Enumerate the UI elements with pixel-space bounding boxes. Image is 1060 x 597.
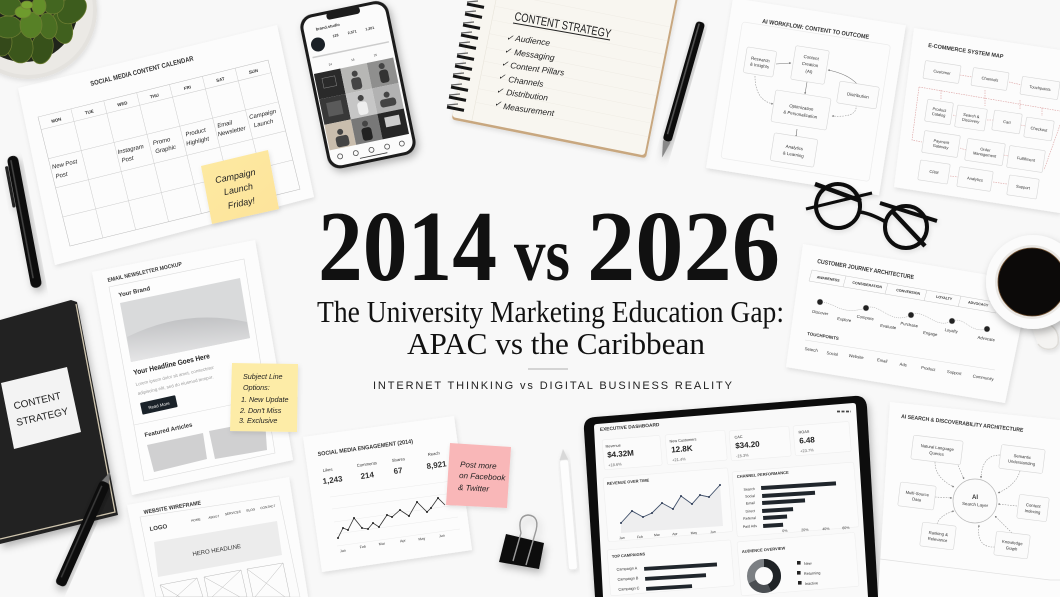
engagement line chart: Jun xyxy=(439,534,445,538)
system map boxes: Fulfillment xyxy=(1017,155,1036,163)
channel performance bars xyxy=(732,462,859,537)
calendar grid: SUN xyxy=(248,68,258,75)
heading: calendar title: SOCIAL MEDIA CONTENT CALENDAR xyxy=(90,55,194,88)
journey phases: CONVERSION xyxy=(896,288,921,296)
phone profile header: 15 xyxy=(373,53,378,57)
stylus xyxy=(559,449,578,570)
notebook checklist: ✓ xyxy=(494,98,502,109)
revenue over time chart: Feb xyxy=(637,535,643,539)
handwritten calendar entries xyxy=(52,109,277,180)
wireframe image placeholders xyxy=(160,563,290,597)
newsletter read more button xyxy=(140,395,178,415)
sticky note: subject line options: 1. New Update xyxy=(241,395,289,404)
handwritten calendar entries: Graphic xyxy=(155,145,177,155)
panel: email newsletter mockup xyxy=(92,240,293,495)
status icons xyxy=(837,410,851,412)
newsletter headline and copy: adipiscing elit, sed do eiusmod tempor. xyxy=(137,374,214,396)
panel: website wireframe xyxy=(127,477,308,597)
heading: AI workflow title: AI WORKFLOW: CONTENT TO OUTCOME xyxy=(762,19,869,41)
featured articles: Featured Articles xyxy=(144,422,194,439)
surrounding nodes: Content xyxy=(1026,502,1042,509)
system map boxes: Catalog xyxy=(931,111,946,118)
workflow boxes: Research xyxy=(751,56,771,64)
KPI cards: New Customers xyxy=(669,437,697,444)
top campaigns bars: Campaign B xyxy=(617,576,639,582)
hub connectors xyxy=(935,455,1020,547)
workflow boxes: Distribution xyxy=(847,91,870,100)
engagement line chart: Mar xyxy=(379,541,386,546)
surrounding nodes: Data xyxy=(912,496,922,503)
handwritten calendar entries: Highlight xyxy=(186,136,210,148)
calendar grid: THU xyxy=(149,92,159,99)
subtitle: The University Marketing Education Gap: xyxy=(317,294,784,329)
surrounding nodes: Semantic xyxy=(1013,453,1031,460)
engagement line chart: May xyxy=(418,537,426,541)
calendar grid: TUE xyxy=(84,109,94,116)
left pen: upper xyxy=(3,155,42,289)
journey path xyxy=(817,299,990,332)
system map boxes: Payment xyxy=(933,138,950,145)
engagement stats: Reach xyxy=(427,450,441,457)
main title: 2014 vs 2026 xyxy=(318,190,780,302)
KPI cards: ROAS xyxy=(798,430,810,435)
journey phases: AWARENESS xyxy=(817,275,840,283)
surrounding nodes: Relevance xyxy=(927,536,948,543)
sticky note: post more: Post more xyxy=(460,460,497,471)
journey phases: ADVOCACY xyxy=(968,300,989,308)
KPI cards: -15.3% xyxy=(736,452,749,458)
subtitle: APAC vs the Caribbean xyxy=(407,326,705,361)
wireframe nav xyxy=(149,504,276,533)
handwritten calendar entries: Post xyxy=(121,156,135,164)
journey phases: CONSIDERATION xyxy=(852,281,883,289)
KPI cards: +23.7% xyxy=(800,447,814,453)
workflow boxes: (AI) xyxy=(805,68,813,75)
notebook: content strategy xyxy=(447,0,685,158)
KPI cards: +18.6% xyxy=(608,461,622,468)
handwritten calendar entries: New Post xyxy=(52,159,78,171)
calendar grid: MON xyxy=(51,117,62,124)
notebook checklist: Content Pillars xyxy=(510,60,566,78)
phone profile header xyxy=(307,13,391,70)
surrounding nodes: Queries xyxy=(929,450,944,457)
workflow arrows xyxy=(755,63,857,137)
top campaigns bars: Campaign A xyxy=(616,566,638,572)
newsletter headline and copy: Lorem ipsum dolor sit amet, consectetur xyxy=(135,365,215,387)
phone profile header: 24 xyxy=(328,62,333,67)
KPI cards: $4.32M xyxy=(607,448,635,460)
wireframe hero: HERO HEADLINE xyxy=(192,544,242,558)
central AI search layer: Search Layer xyxy=(962,501,989,508)
notebook checklist: Distribution xyxy=(506,87,549,103)
engagement line chart: Jan xyxy=(340,549,346,553)
wireframe nav: HOME xyxy=(191,517,201,523)
revenue over time chart: Apr xyxy=(672,532,679,536)
heading: newsletter title: EMAIL NEWSLETTER MOCKUP xyxy=(107,262,183,284)
surrounding nodes xyxy=(898,435,1049,559)
workflow boxes: Content xyxy=(803,54,820,61)
calendar grid xyxy=(38,60,300,246)
glasses xyxy=(806,179,937,248)
heading: engagement title: SOCIAL MEDIA ENGAGEMENT (2014) xyxy=(317,439,413,458)
subtitle xyxy=(317,294,784,361)
main title: 2014 vs 2026: vs xyxy=(514,213,570,297)
surrounding nodes: Ranking & xyxy=(928,530,948,537)
journey stage labels: Evaluate xyxy=(880,323,897,330)
newsletter hero image xyxy=(120,278,250,362)
revenue over time chart: Jan xyxy=(619,536,625,540)
journey stage labels: Engage xyxy=(923,330,938,337)
channel performance bars: 0% xyxy=(782,529,788,533)
handwritten calendar entries: Newsletter xyxy=(217,126,247,138)
journey stage labels: Compare xyxy=(856,314,875,321)
engagement line chart: Feb xyxy=(360,545,366,549)
KPI cards: Revenue xyxy=(605,443,621,449)
sticky note: subject line options: Subject Line xyxy=(243,372,283,381)
sticky note: post more xyxy=(446,443,511,508)
wireframe nav: SERVICES xyxy=(225,510,241,516)
audience overview donut: AUDIENCE OVERVIEW xyxy=(742,545,786,554)
notebook label: content strategy xyxy=(1,367,81,449)
system map boxes: Management xyxy=(973,150,997,159)
touchpoints row: Ads xyxy=(899,361,907,368)
sticky note: campaign launch: Launch xyxy=(223,181,254,197)
system map boxes: Touchpoints xyxy=(1029,84,1051,92)
channel performance bars: 40% xyxy=(822,527,830,531)
engagement stats: Shares xyxy=(391,456,405,463)
system map boxes: Product xyxy=(932,106,947,113)
channel performance bars: Social xyxy=(745,494,755,499)
revenue over time chart xyxy=(603,468,733,542)
phone profile header: 1,201 xyxy=(365,26,375,32)
KPI cards xyxy=(602,421,851,470)
touchpoints row xyxy=(804,331,995,382)
sticky note: campaign launch: Campaign xyxy=(214,167,256,185)
calendar grid: FRI xyxy=(183,84,191,91)
channel performance bars: Search xyxy=(743,487,755,492)
engagement stats: 214 xyxy=(360,470,375,481)
handwritten calendar entries: Instagram xyxy=(117,144,144,156)
system map boxes: Gateway xyxy=(932,143,949,150)
notebook label: content strategy: CONTENT xyxy=(13,391,62,412)
system map boxes: Order xyxy=(980,146,991,153)
wireframe hero xyxy=(154,521,282,577)
closed black notebook xyxy=(0,300,118,544)
engagement line chart xyxy=(330,481,460,553)
top campaigns bars xyxy=(607,540,734,596)
system map boxes: Checkout xyxy=(1030,125,1049,133)
sticky note: subject line options xyxy=(230,363,298,432)
KPI cards: 6.48 xyxy=(799,435,816,446)
notebook label: content strategy: STRATEGY xyxy=(15,406,70,429)
phone nav icons xyxy=(337,141,405,163)
featured articles xyxy=(144,420,267,472)
journey stage labels xyxy=(812,309,996,342)
channel performance bars: Paid Ads xyxy=(743,524,757,529)
central AI search layer xyxy=(953,479,997,523)
touchpoints row: TOUCHPOINTS xyxy=(807,331,839,341)
notebook checklist: ✓ xyxy=(496,85,504,96)
sticky note: campaign launch: Friday! xyxy=(227,195,256,211)
system map boxes: Search & xyxy=(963,112,980,119)
touchpoints row: Email xyxy=(877,357,888,364)
system map boxes: Support xyxy=(1016,183,1031,191)
wireframe nav: BLOG xyxy=(246,507,256,513)
phone profile header: brand.studio xyxy=(315,22,341,32)
system map boxes xyxy=(918,60,1060,199)
workflow boxes: Optimization xyxy=(789,103,814,112)
workflow boxes: Analytics xyxy=(785,144,804,151)
panel: AI search architecture xyxy=(878,402,1060,597)
workflow boxes: & Learning xyxy=(782,150,805,159)
touchpoints row: Support xyxy=(947,369,963,376)
channel performance bars: Referral xyxy=(743,516,756,521)
top campaigns bars: TOP CAMPAIGNS xyxy=(612,551,646,559)
system map boxes: Discovery xyxy=(962,117,980,124)
KPI cards: 12.8K xyxy=(671,444,693,455)
device: smartphone social profile xyxy=(298,0,418,171)
calendar grid: SAT xyxy=(216,76,225,83)
touchpoints row: Social xyxy=(826,350,838,357)
notebook checklist: Channels xyxy=(508,74,545,89)
audience overview donut: Inactive xyxy=(805,581,818,586)
audience overview donut xyxy=(737,532,859,596)
sticky note: subject line options: Options: xyxy=(243,383,270,392)
surrounding nodes: Understanding xyxy=(1008,458,1036,467)
panel: customer journey sheet xyxy=(786,244,1030,403)
pen: on black notebook xyxy=(55,470,115,588)
system map boxes: Channels xyxy=(981,75,999,83)
notebook checklist: ✓ xyxy=(506,32,514,43)
heading: dashboard title: EXECUTIVE DASHBOARD xyxy=(600,422,660,433)
journey stage labels: Advocate xyxy=(977,335,996,342)
handwritten calendar entries: Email xyxy=(217,120,233,130)
revenue over time chart: May xyxy=(691,531,698,535)
tablet: executive dashboard xyxy=(584,396,878,597)
wireframe nav: CONTACT xyxy=(260,504,276,510)
heading: wireframe title: WEBSITE WIREFRAME xyxy=(143,500,202,516)
engagement stats: 67 xyxy=(393,466,404,476)
top campaigns bars: Campaign C xyxy=(618,586,640,592)
phone photo grid xyxy=(314,58,409,150)
notebook heading: CONTENT STRATEGY xyxy=(513,9,612,41)
notebook checklist xyxy=(494,32,566,118)
pink connector lines xyxy=(912,75,1060,184)
revenue over time chart: REVENUE OVER TIME xyxy=(607,478,650,486)
main title: 2014 vs 2026: 2026 xyxy=(587,190,780,302)
newsletter brand: Your Brand xyxy=(118,286,151,299)
surrounding nodes: Natural Language xyxy=(920,443,955,452)
workflow boxes: & Insights xyxy=(750,61,770,70)
touchpoints row: Search xyxy=(804,346,819,353)
system map boxes: Analytics xyxy=(967,175,983,183)
spiral binding xyxy=(447,1,484,110)
panel: social media engagement xyxy=(303,416,472,572)
panel: content calendar sheet xyxy=(18,25,314,265)
notebook checklist: ✓ xyxy=(501,58,509,69)
workflow boxes: Creation xyxy=(801,61,819,68)
tagline: INTERNET THINKING vs DIGITAL BUSINESS REALITY xyxy=(373,380,733,392)
surrounding nodes: Multi-Source xyxy=(905,490,930,498)
engagement stats: 1,243 xyxy=(322,474,344,486)
newsletter headline and copy xyxy=(132,351,215,396)
sticky note: subject line options: 2. Don't Miss xyxy=(239,406,282,415)
phone profile header: 128 xyxy=(332,33,339,38)
wireframe nav: ABOUT xyxy=(208,514,220,520)
channel performance bars: CHANNEL PERFORMANCE xyxy=(737,470,789,479)
revenue over time chart: Jun xyxy=(710,530,716,534)
sticky note: post more: on Facebook xyxy=(459,471,507,482)
journey phases: LOYALTY xyxy=(936,295,953,301)
sticky note: post more: & Twitter xyxy=(458,483,490,494)
sticky note: campaign launch xyxy=(201,150,279,224)
handwritten calendar entries: Product xyxy=(185,128,207,138)
KPI cards: $34.20 xyxy=(735,440,761,451)
channel performance bars: 60% xyxy=(842,526,850,530)
handwritten calendar entries: Launch xyxy=(254,119,275,129)
surrounding nodes: Knowledge xyxy=(1002,539,1024,546)
newsletter read more button: Read More xyxy=(148,401,171,410)
journey stage labels: Purchase xyxy=(900,321,919,328)
journey phases xyxy=(809,270,1000,313)
heading: journey title: CUSTOMER JOURNEY ARCHITECTURE xyxy=(817,259,914,281)
newsletter headline and copy: Your Headline Goes Here xyxy=(132,351,211,377)
engagement stats: 8,921 xyxy=(426,459,448,471)
coffee cup xyxy=(986,235,1060,349)
phone profile header: 2,571 xyxy=(347,29,357,35)
journey stage labels: Explore xyxy=(837,316,852,323)
notebook checklist: ✓ xyxy=(498,71,506,82)
binder clip xyxy=(499,515,544,569)
handwritten calendar entries: Promo xyxy=(152,137,172,147)
audience overview donut: New xyxy=(804,562,812,566)
system map boxes: CRM xyxy=(929,169,939,175)
notebook checklist: Audience xyxy=(514,33,551,48)
touchpoints row: Community xyxy=(972,373,995,382)
revenue over time chart: Mar xyxy=(654,533,661,537)
pen: beside notebook xyxy=(658,21,705,159)
panel: AI workflow sheet xyxy=(706,0,906,195)
handwritten calendar entries: Campaign xyxy=(249,109,277,121)
KPI cards: CAC xyxy=(734,435,743,440)
journey stage labels: Discover xyxy=(812,309,829,316)
engagement stats: Comments xyxy=(356,460,377,468)
workflow boxes xyxy=(743,46,879,167)
notebook checklist: Measurement xyxy=(503,101,555,118)
notebook checklist: Messaging xyxy=(514,47,556,63)
handwritten calendar entries: Post xyxy=(55,172,69,180)
sticky note: subject line options: 3. Exclusive xyxy=(239,416,277,425)
workflow boxes: & Personalization xyxy=(783,109,818,120)
central AI search layer: AI xyxy=(972,495,978,501)
phone profile header: 16 xyxy=(351,57,355,62)
channel performance bars: Email xyxy=(746,501,755,506)
journey stage labels: Loyalty xyxy=(944,327,959,334)
touchpoints row: Website xyxy=(848,353,865,360)
plant: succulent in white pot xyxy=(0,0,97,79)
touchpoints row: Product xyxy=(921,365,937,372)
channel performance bars: 20% xyxy=(801,528,809,532)
main title: 2014 vs 2026: 2014 xyxy=(318,190,497,302)
heading: e-commerce title: E-COMMERCE SYSTEM MAP xyxy=(928,43,1004,60)
surrounding nodes: Indexing xyxy=(1024,508,1041,515)
engagement stats: Likes xyxy=(322,467,333,473)
KPI cards: +21.4% xyxy=(672,456,686,462)
title block xyxy=(317,190,784,392)
calendar grid: WED xyxy=(117,100,128,108)
engagement stats xyxy=(322,450,448,486)
audience overview donut: Returning xyxy=(804,571,820,576)
wireframe nav: LOGO xyxy=(149,524,168,533)
notebook checklist: ✓ xyxy=(504,45,512,56)
heading: AI search title: AI SEARCH & DISCOVERABILITY ARCHITECTURE xyxy=(901,414,1024,434)
surrounding nodes: Graph xyxy=(1005,545,1018,552)
system map boxes: Customer xyxy=(933,68,952,76)
system map boxes: Cart xyxy=(1003,119,1012,125)
channel performance bars: Direct xyxy=(745,509,755,514)
panel: e-commerce system map sheet xyxy=(894,28,1060,213)
engagement line chart: Apr xyxy=(400,539,407,543)
